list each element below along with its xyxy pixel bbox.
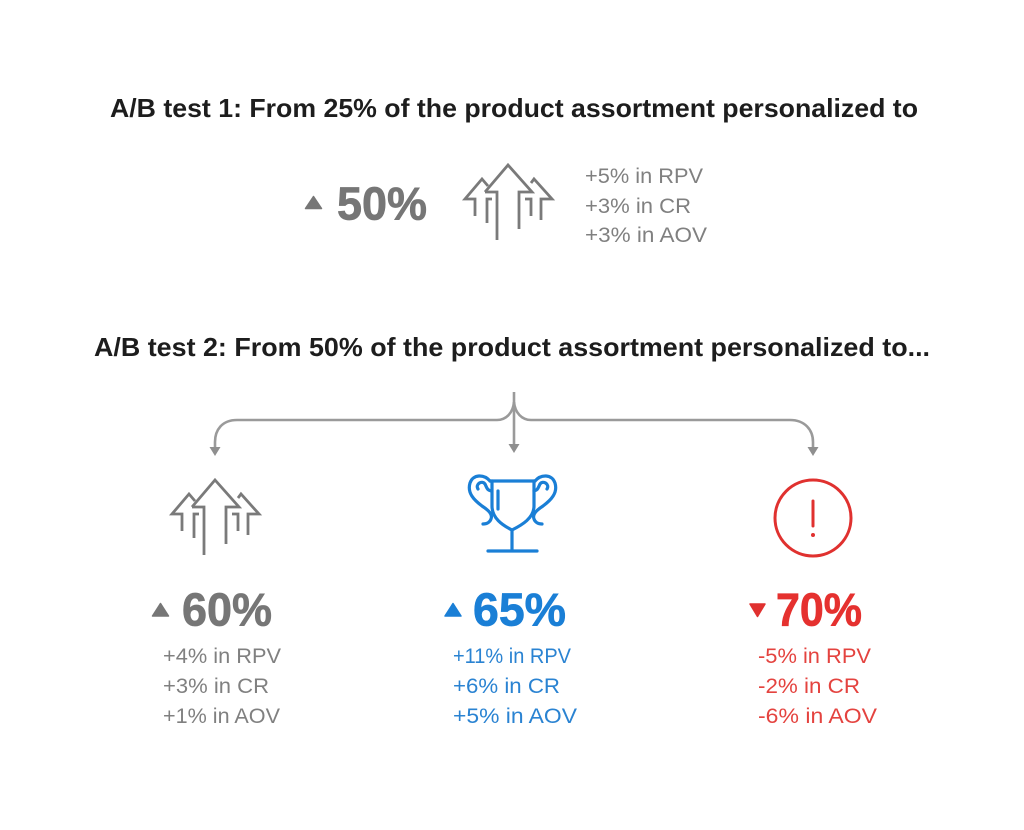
- option 60%: [152, 584, 281, 728]
- metrics: +6% in CR: [453, 675, 560, 698]
- option 65%: [445, 584, 577, 728]
- triangle up: 50%: [306, 196, 322, 208]
- branching arrows: [210, 392, 818, 456]
- metrics: test 1: [585, 165, 707, 247]
- metrics: [453, 645, 577, 728]
- value: 60%: [182, 584, 272, 636]
- triangle up: [445, 604, 461, 616]
- metrics: test 1: +5% in RPV: [585, 165, 703, 188]
- value: 65%: [473, 584, 566, 636]
- heading: test 2: A/B test 2: From 50% of the product assortment personalized to...: [94, 332, 930, 362]
- icon: arrows up, option 60%: [172, 480, 259, 555]
- metrics: -5% in RPV: [758, 645, 871, 668]
- metrics: test 1: +3% in AOV: [585, 224, 707, 247]
- triangle down: [750, 604, 765, 616]
- heading: test 1: A/B test 1: From 25% of the product assortment personalized to: [110, 93, 918, 123]
- metrics: +3% in CR: [163, 675, 269, 698]
- metrics: +5% in AOV: [453, 705, 577, 728]
- icon: arrows up: [465, 165, 552, 240]
- metrics: +4% in RPV: [163, 645, 281, 668]
- metrics: [758, 645, 877, 728]
- metrics: +11% in RPV: [453, 645, 571, 668]
- value: 50%: 50%: [337, 178, 427, 230]
- value: 70%: [776, 584, 862, 636]
- metrics: +1% in AOV: [163, 705, 280, 728]
- metrics: -2% in CR: [758, 675, 860, 698]
- option 70%: [750, 584, 877, 728]
- metrics: -6% in AOV: [758, 705, 877, 728]
- metrics: [163, 645, 281, 728]
- icon: trophy: [469, 476, 556, 551]
- metrics: test 1: +3% in CR: [585, 195, 691, 218]
- triangle up: [152, 604, 168, 616]
- icon: alert: [775, 480, 851, 556]
